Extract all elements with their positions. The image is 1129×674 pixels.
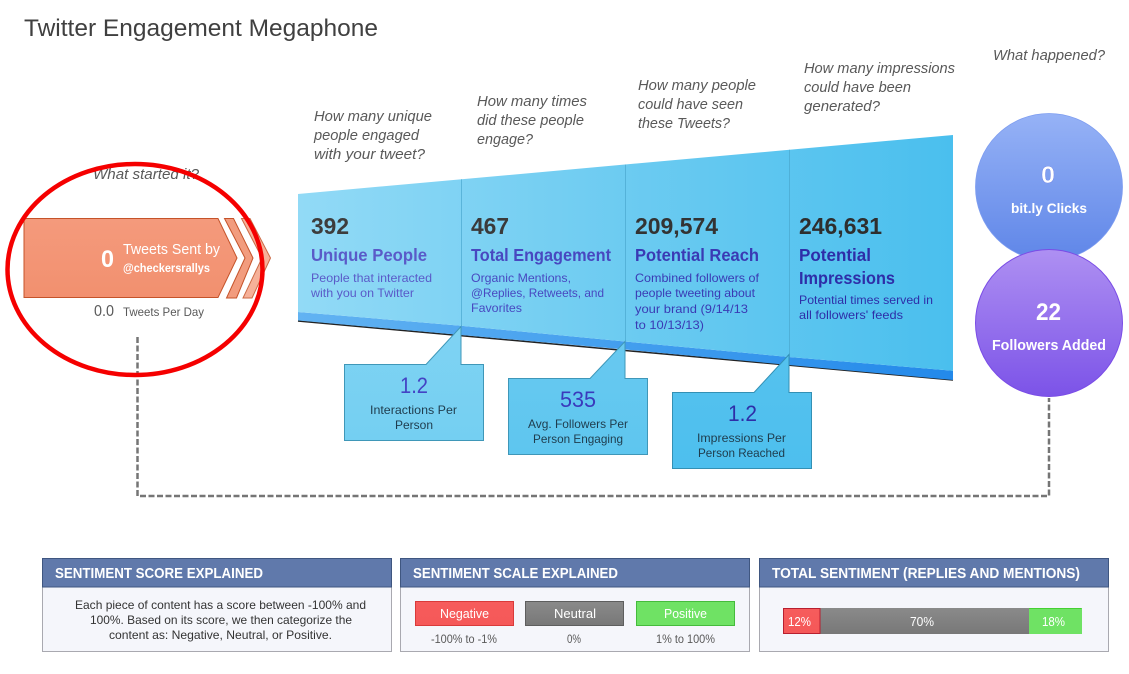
callout: interactions per person: Interactions Per [370, 403, 457, 417]
metric: total engagement: Organic Mentions, [471, 271, 571, 285]
metric: potential reach: Potential Reach [635, 245, 759, 265]
question: reach: these Tweets? [638, 116, 731, 132]
question: what started it: What started it? [93, 167, 200, 183]
panel header [400, 558, 750, 587]
chevron: outer [242, 218, 270, 298]
question: unique people: How many unique [314, 109, 432, 125]
connector: dashed line from tweets to results [138, 337, 1049, 496]
callout: interactions per person [344, 326, 484, 440]
stacked sentiment bar [784, 608, 1082, 634]
chevron: middle [224, 218, 253, 298]
metric: potential reach: people tweeting about [635, 286, 756, 300]
stacked sentiment bar: 12% [788, 615, 811, 629]
question: engagement [477, 94, 587, 148]
metric: total engagement: Total Engagement [471, 245, 611, 265]
circle: followers added: 22 [1036, 299, 1061, 326]
scale: negative: -100% to -1% [431, 634, 497, 646]
handle: @checkersrallys [123, 261, 210, 275]
questions above megaphone [313, 48, 1106, 163]
metric: unique people: Unique People [311, 245, 427, 265]
question: impressions: How many impressions [804, 61, 955, 77]
metric: potential reach: Combined followers of [635, 271, 760, 285]
metric: unique people [310, 213, 432, 300]
callout: followers per person: 535 [560, 387, 596, 412]
question: what happened: What happened? [993, 48, 1106, 64]
question: engagement: did these people [477, 113, 584, 129]
callout: impressions per person: 1.2 [728, 401, 757, 426]
panel body text: content as: Negative, Neutral, or Positive. [109, 628, 332, 642]
metric: unique people: People that interacted [311, 271, 432, 285]
metric: total engagement: @Replies, Retweets, and [471, 286, 604, 300]
red highlight ellipse [8, 164, 262, 375]
metric: potential impressions: Impressions [799, 268, 895, 288]
question: impressions: could have been [804, 80, 911, 96]
panel body text: Each piece of content has a score between -100% and [75, 598, 366, 612]
scale: positive: Positive [664, 606, 707, 621]
question: reach [638, 78, 756, 132]
tweets per day [94, 303, 204, 320]
callout: impressions per person [672, 354, 812, 468]
callout: interactions per person: Person [395, 418, 433, 432]
question: engagement: engage? [477, 132, 534, 148]
panel: sentiment score explained [42, 558, 392, 652]
metric: potential reach: to 10/13/13) [635, 318, 704, 332]
metric: potential impressions: all followers' feeds [799, 308, 903, 322]
question: unique people: with your tweet? [314, 147, 426, 163]
metric: total engagement: 467 [471, 213, 509, 239]
metric: potential reach: 209,574 [635, 213, 718, 239]
arrow body [24, 218, 237, 298]
metric: unique people: 392 [311, 213, 349, 239]
tweets per day: Tweets Per Day [123, 305, 204, 319]
question: unique people: people engaged [313, 128, 420, 144]
scale: positive: 1% to 100% [656, 634, 715, 646]
panel header: SENTIMENT SCORE EXPLAINED [55, 566, 263, 582]
metric: potential impressions [799, 213, 933, 322]
panel header: TOTAL SENTIMENT (REPLIES AND MENTIONS) [772, 566, 1080, 582]
question: impressions: generated? [804, 99, 881, 115]
callout: followers per person [508, 342, 648, 454]
tweets sent arrow group [24, 218, 270, 298]
panel: sentiment scale explained [400, 558, 750, 652]
panel header [760, 558, 1108, 587]
metric: potential impressions: Potential [799, 245, 871, 265]
callout: impressions per person: Person Reached [698, 446, 785, 460]
funnel blue strip [298, 312, 953, 380]
question: unique people [313, 109, 432, 163]
metric: potential reach [635, 213, 760, 332]
panel header [42, 558, 392, 587]
scale: neutral: 0% [567, 634, 581, 646]
scale: positive [636, 602, 734, 646]
metric: unique people: with you on Twitter [310, 286, 414, 300]
metric: potential impressions: 246,631 [799, 213, 882, 239]
circle: followers added [976, 250, 1122, 396]
callout: followers per person: Person Engaging [533, 432, 623, 446]
tweets per day: 0.0 [94, 303, 114, 320]
scale: neutral [526, 602, 624, 646]
circle: bit.ly clicks: bit.ly Clicks [1011, 200, 1087, 216]
metric: potential reach: your brand (9/14/13 [635, 302, 748, 316]
metric: total engagement [471, 213, 611, 315]
circle: bit.ly clicks [976, 114, 1122, 260]
funnel underside shadow line [298, 321, 953, 380]
scale: negative: Negative [440, 606, 489, 621]
question: impressions [804, 61, 955, 115]
stacked sentiment bar: 70% [910, 615, 934, 629]
circle: followers added: Followers Added [992, 338, 1106, 354]
scale: negative [416, 602, 514, 646]
funnel body [298, 135, 953, 371]
title: Twitter Engagement Megaphone [24, 15, 378, 42]
megaphone funnel [298, 135, 953, 380]
question: engagement: How many times [477, 94, 587, 110]
panel body text [75, 598, 366, 642]
metric: potential impressions: Potential times served in [799, 293, 933, 307]
panel header: SENTIMENT SCALE EXPLAINED [413, 566, 618, 582]
scale: neutral: Neutral [554, 606, 596, 621]
tweets count: 0 [101, 246, 114, 273]
callout: interactions per person: 1.2 [400, 373, 428, 398]
stacked sentiment bar: 18% [1042, 615, 1065, 629]
metric: total engagement: Favorites [471, 301, 522, 315]
tweets label: Tweets Sent by [123, 242, 221, 258]
panel: total sentiment [760, 558, 1108, 652]
panel body text: 100%. Based on its score, we then categorize the [90, 613, 352, 627]
callout: impressions per person: Impressions Per [697, 431, 786, 445]
question: reach: How many people [638, 78, 756, 94]
question: reach: could have seen [638, 97, 743, 113]
circle: bit.ly clicks: 0 [1041, 162, 1055, 189]
callout: followers per person: Avg. Followers Per [528, 417, 628, 431]
